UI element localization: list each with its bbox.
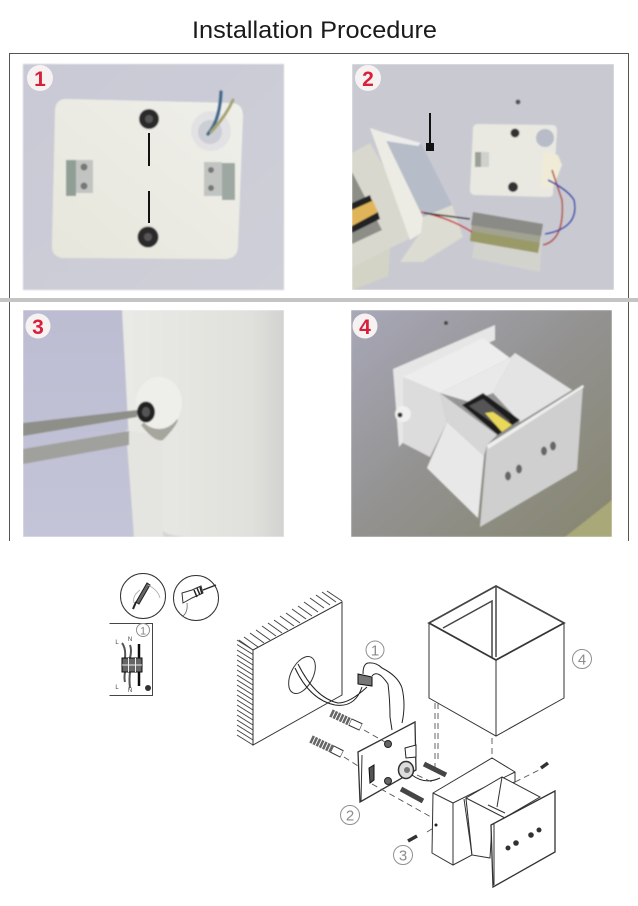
badge 2: 2 — [362, 68, 374, 91]
back plate — [393, 325, 495, 447]
mounting plate — [52, 99, 243, 259]
badge 4 — [352, 314, 378, 339]
exploded assembly drawing — [237, 586, 592, 887]
box body side — [403, 377, 447, 457]
wiring terminal diagram: L — [115, 685, 119, 691]
screws — [138, 109, 159, 248]
left flap — [427, 422, 484, 518]
badge 2 — [355, 65, 381, 91]
grommet — [140, 419, 178, 441]
flap top wedge — [440, 393, 497, 456]
wiring terminal diagram: L — [115, 640, 119, 646]
mounting plate — [358, 722, 440, 802]
cable — [23, 410, 137, 436]
perforations — [505, 442, 556, 480]
wall with hatching — [237, 591, 342, 745]
terminal connector and wires — [358, 663, 404, 730]
panel: step 2 photo — [352, 64, 614, 290]
wall panel — [122, 310, 284, 537]
wiring terminal diagram: N — [128, 688, 132, 694]
wires — [421, 170, 575, 245]
top screw — [541, 763, 548, 768]
lower wall anchor — [311, 739, 342, 754]
lamp housing back — [352, 144, 409, 267]
label 2: 2 — [346, 808, 354, 824]
alignment dashes — [435, 703, 492, 767]
lower housing — [432, 758, 540, 865]
side knob — [395, 406, 411, 422]
badge 1 — [27, 65, 53, 91]
inner right panel — [493, 353, 572, 422]
box top — [403, 338, 510, 393]
panel: step 4 photo — [351, 310, 612, 537]
badge 3 — [26, 314, 50, 339]
wall hole — [516, 100, 520, 104]
label 2 — [340, 806, 360, 824]
icon: stripping wire — [120, 574, 166, 618]
wall opening — [283, 652, 321, 698]
cable wires — [208, 92, 233, 134]
panel: wiring detail icons — [110, 574, 218, 696]
label 3: 3 — [399, 848, 407, 864]
mounting plate — [470, 124, 557, 197]
grommet — [191, 111, 231, 151]
side screw — [408, 836, 417, 841]
front panel — [480, 385, 583, 527]
label 3 — [394, 846, 412, 864]
led bay — [462, 393, 520, 435]
wiring terminal diagram: N — [128, 637, 132, 643]
cable shadow — [23, 431, 129, 464]
housing frame — [370, 128, 423, 240]
right bracket — [204, 162, 235, 200]
terminal block — [541, 152, 562, 188]
badge 3: 3 — [32, 316, 44, 339]
frame around the photos — [10, 54, 628, 541]
wiring terminal diagram — [110, 624, 152, 696]
label 4 — [572, 650, 592, 668]
housing lower body — [400, 205, 463, 262]
fixing lines — [344, 730, 440, 832]
badge 4: 4 — [359, 316, 371, 339]
label 1 — [366, 641, 384, 660]
black marking lines — [148, 133, 150, 223]
panel: step 1 photo — [23, 64, 284, 290]
mains cable — [295, 664, 367, 705]
divider band — [0, 298, 638, 302]
cover cube — [429, 586, 564, 736]
black pointer — [426, 113, 434, 151]
label 1: 1 — [371, 642, 379, 660]
label 4: 4 — [578, 652, 586, 668]
title: Installation Procedure — [192, 17, 437, 44]
left bracket — [66, 160, 93, 196]
driver — [470, 212, 543, 272]
wiring terminal diagram: 1 — [140, 626, 146, 638]
mounting screws — [401, 764, 446, 801]
upper wall anchor — [331, 713, 361, 727]
icon: inserting wire — [174, 576, 218, 620]
front panel — [491, 791, 555, 887]
panel: step 3 photo — [23, 310, 284, 537]
badge 1: 1 — [34, 68, 46, 91]
